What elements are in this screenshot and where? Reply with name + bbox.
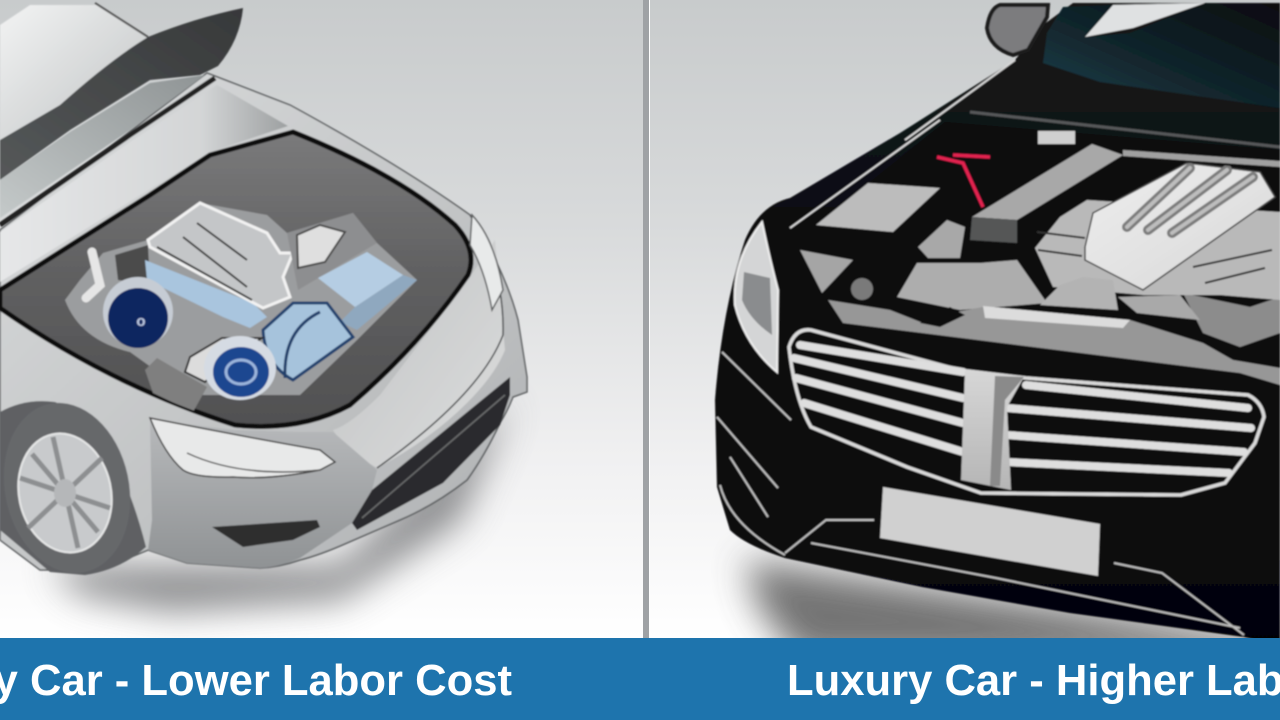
wheel arch: economy [0,401,146,575]
black trim line [0,78,215,225]
headlight: luxury [735,222,778,372]
radiator cross panel [828,300,1280,385]
air intake: economy [352,377,510,530]
left reservoir cap [851,278,873,300]
panel: economy car background [0,0,643,638]
side headlight: economy [470,215,503,310]
cross panel trim [983,306,1130,328]
intake cover [148,203,293,308]
bay left liner [800,250,853,293]
right reservoir [204,336,276,400]
engine side block [1035,200,1280,300]
center hose [1039,286,1120,312]
hood edge: luxury [790,60,1015,228]
engine bay: economy [0,132,471,426]
ground shadow: luxury car [745,560,1280,660]
side mirror: luxury [987,5,1048,55]
blue duct [263,303,353,380]
light blue box lower [340,275,417,330]
hood front panel: economy [333,240,505,468]
left reservoir: o [136,313,146,330]
engine cover [1085,163,1275,290]
left reservoir [103,277,173,348]
panel: luxury car illustration [715,3,1280,645]
hardware cluster [297,225,345,268]
hood lid edge line [95,3,148,37]
engine bay: luxury [815,122,1280,367]
car body: economy [0,73,527,570]
ground shadow: economy car [50,400,510,612]
engine shroud arm [968,142,1280,244]
fender band: economy [0,85,288,282]
corrugated hose [145,358,207,412]
left hoses [86,252,100,298]
engine block ribs [1037,232,1272,283]
headlight inner line [187,453,320,472]
fog vent: economy [212,520,320,547]
engine: economy [65,203,417,412]
car body: luxury [715,3,1280,645]
cowl line [970,112,1280,147]
front bumper: economy [148,420,377,568]
engine base [65,203,417,395]
raised hood lid: economy [0,5,148,140]
duct rib [285,312,320,378]
red cable [937,155,990,207]
headlight: economy [150,418,335,478]
coil packs [918,220,965,258]
right engine bay fill [1183,293,1280,347]
fuse tag [1038,131,1075,144]
windshield: economy [0,75,205,218]
hood lid lower band: economy [0,8,243,180]
top right manifold [287,213,377,290]
caption bar [0,638,1280,720]
windshield: luxury [1043,3,1280,108]
panel: luxury car background [650,0,1280,638]
dark recess [115,245,150,285]
light blue box [318,252,403,307]
battery cover [816,183,940,232]
center divider [643,0,649,638]
license plate: luxury [880,487,1100,576]
front wheel: economy [0,391,146,585]
bumper highlights: luxury [717,352,1244,635]
windshield reflection: luxury [1085,3,1205,37]
blue under-cover [145,260,267,328]
right hose block [1118,295,1200,320]
latch [920,307,965,327]
grille: luxury [789,330,1264,495]
panel: economy car illustration [0,3,527,585]
fender line: economy [377,215,503,468]
central hardware [185,338,262,382]
headlight inner [742,272,772,335]
intake hose [897,260,1047,310]
